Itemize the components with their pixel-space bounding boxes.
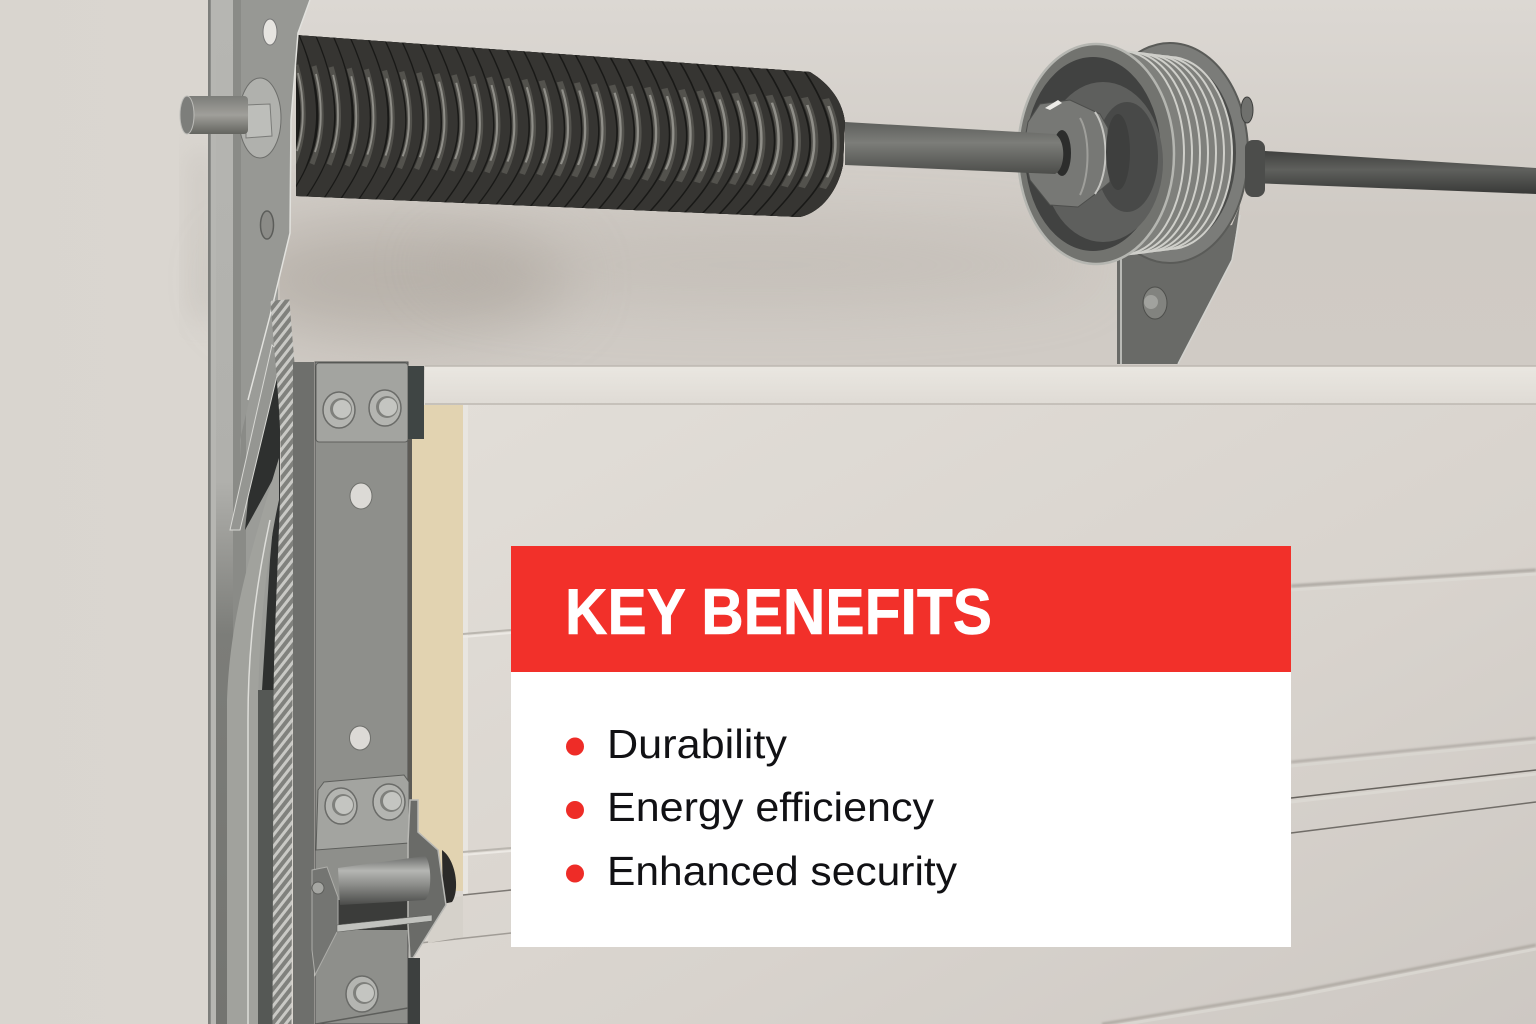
card: key benefits bbox=[511, 546, 1291, 947]
left hinge leaf bbox=[312, 867, 338, 975]
wall above door bbox=[280, 0, 1536, 370]
bracket holes bbox=[263, 19, 277, 45]
upper bolts bbox=[323, 392, 355, 428]
mounting stud and nut bbox=[180, 78, 281, 158]
hub nut bbox=[1023, 100, 1110, 207]
lower door rail stub bbox=[428, 896, 463, 943]
plate holes bbox=[350, 483, 372, 509]
bullet: enhanced security: Enhanced security bbox=[607, 848, 958, 894]
door side channel bbox=[293, 362, 314, 1024]
card header bbox=[511, 546, 1291, 672]
door top rail bbox=[425, 366, 1536, 404]
hinge roller bbox=[338, 856, 430, 905]
hinge lower bar bbox=[337, 915, 432, 932]
top bracket plate bbox=[240, 0, 310, 460]
torsion spring bbox=[296, 35, 845, 217]
steel track bbox=[208, 0, 278, 1024]
drum rear collar bbox=[1245, 140, 1265, 197]
hub collar shadow bbox=[1053, 130, 1071, 176]
vertical guide strip bbox=[230, 345, 282, 530]
door panel bbox=[416, 366, 1536, 1024]
curved cable guide bbox=[227, 458, 279, 1024]
shadow under spring bbox=[230, 225, 1100, 335]
lifting cable bbox=[280, 300, 290, 1024]
cable drum support bracket bbox=[1117, 205, 1240, 364]
insulation foam core bbox=[412, 405, 463, 891]
title: KEY BENEFITS bbox=[565, 575, 992, 648]
cable drum pulley bbox=[1018, 43, 1265, 264]
hinge bbox=[312, 800, 456, 975]
door grooves bbox=[420, 570, 1536, 1024]
upper plate bbox=[316, 363, 408, 442]
lower plate bbox=[316, 775, 409, 850]
bullet: energy efficiency: Energy efficiency bbox=[607, 784, 935, 830]
shadow beside track bbox=[190, 150, 212, 320]
bullet: durability: Durability bbox=[607, 721, 788, 767]
door left highlight bbox=[463, 405, 468, 895]
right hinge leaf bbox=[408, 800, 446, 958]
drum grooves bbox=[1060, 51, 1232, 255]
dark end block bbox=[408, 366, 424, 439]
spring shaft right bbox=[1250, 150, 1536, 194]
front flange bbox=[1018, 44, 1174, 264]
spring shaft left bbox=[845, 122, 1063, 174]
side plate bbox=[315, 362, 424, 1024]
rubber seal bbox=[442, 850, 456, 904]
bottom bolt bbox=[346, 976, 378, 1012]
gap behind strip bbox=[245, 378, 280, 690]
